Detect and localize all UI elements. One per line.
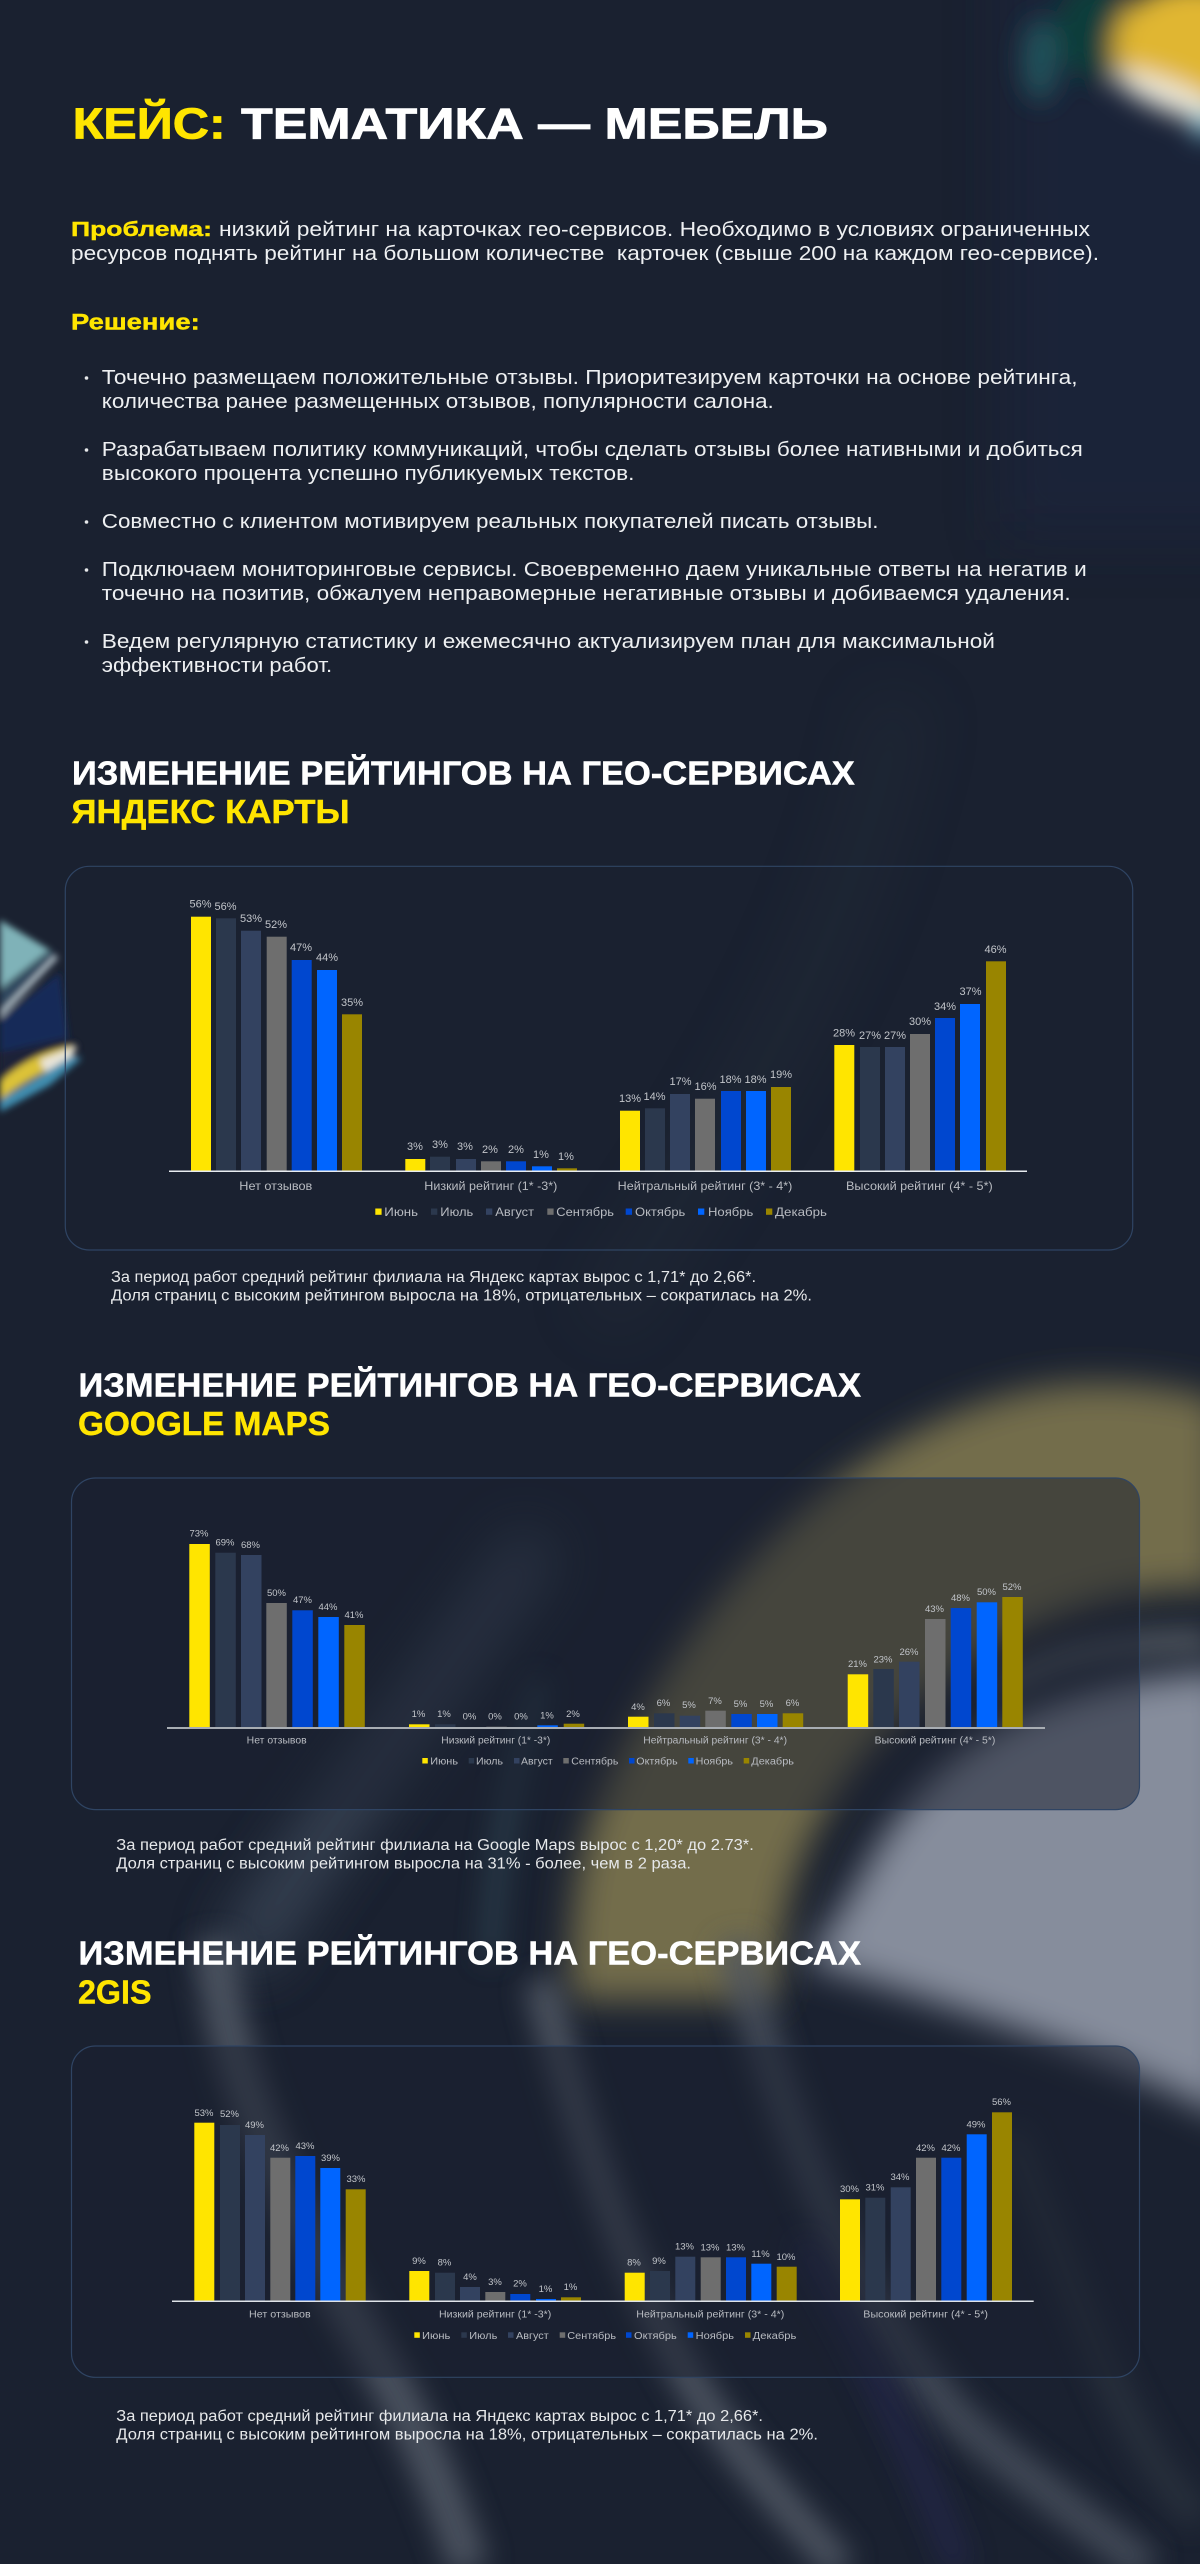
legend: Октябрь bbox=[634, 2330, 677, 2342]
bar group: neutral rating: 9% bbox=[652, 2256, 666, 2267]
bar group: no reviews: 69% bbox=[215, 1537, 235, 1548]
bar group: neutral rating: 13% bbox=[675, 2242, 695, 2252]
bar group: low rating bbox=[409, 2256, 581, 2301]
bar group: neutral rating: 8% bbox=[627, 2258, 641, 2268]
bar group: low rating: 3% bbox=[407, 1141, 423, 1153]
bar group: low rating: 4% bbox=[463, 2272, 477, 2283]
solution bullet list: количества ранее размещенных отзывов, популярности салона. bbox=[102, 391, 774, 413]
bar group: neutral rating: 17% bbox=[669, 1076, 692, 1088]
bar group: high rating: 48% bbox=[951, 1593, 971, 1604]
heading: Yandex Maps bbox=[72, 754, 855, 830]
bar group: high rating: 50% bbox=[977, 1587, 997, 1598]
note: Google Maps: Доля страниц с высоким рейтингом выросла на 31% - более, чем в 2 раза. bbox=[116, 1856, 691, 1872]
note: Yandex Maps: Доля страниц с высоким рейтингом выросла на 18%, отрицательных – сократилась на 2%. bbox=[111, 1288, 812, 1304]
note: Google Maps: За период работ средний рейтинг филиала на Google Maps вырос с 1,20* до 2.73*. bbox=[116, 1837, 754, 1854]
bar group: neutral rating: 13% bbox=[726, 2242, 746, 2254]
solution bullet list: Ведем регулярную статистику и ежемесячно актуализируем план для максимальной bbox=[102, 631, 995, 653]
bar group: low rating: 2% bbox=[513, 2278, 527, 2290]
heading: 2GIS: 2GIS bbox=[78, 1974, 152, 2010]
bar group: low rating: 1% bbox=[437, 1709, 451, 1720]
bar group: high rating: 27% bbox=[859, 1030, 881, 1042]
legend: Июнь bbox=[422, 2331, 450, 2342]
bar group: neutral rating: 10% bbox=[776, 2252, 796, 2263]
category labels: Высокий рейтинг (4* - 5*) bbox=[875, 1736, 995, 1746]
legend: Декабрь bbox=[751, 1756, 794, 1768]
panel: 2GIS chart bbox=[72, 2046, 1140, 2377]
heading: Yandex Maps: ИЗМЕНЕНИЕ РЕЙТИНГОВ НА ГЕО-СЕРВИСАХ bbox=[72, 754, 855, 792]
bar group: neutral rating: 6% bbox=[657, 1698, 671, 1709]
bar group: neutral rating: 18% bbox=[719, 1074, 742, 1086]
solution bullet list: Разрабатываем политику коммуникаций, чтобы сделать отзывы более нативными и добиться bbox=[102, 439, 1083, 461]
bar group: no reviews: 56% bbox=[214, 901, 237, 913]
heading: Google Maps: ИЗМЕНЕНИЕ РЕЙТИНГОВ НА ГЕО-СЕРВИСАХ bbox=[78, 1366, 861, 1404]
category labels: Низкий рейтинг (1* -3*) bbox=[424, 1179, 557, 1193]
category labels bbox=[247, 1736, 995, 1746]
legend: Сентябрь bbox=[567, 2330, 616, 2342]
note: 2GIS: Доля страниц с высоким рейтингом выросла на 18%, отрицательных – сократилась на 2%. bbox=[116, 2426, 818, 2444]
bar group: neutral rating: 13% bbox=[619, 1093, 641, 1105]
bar group: low rating: 2% bbox=[482, 1144, 498, 1156]
bar group: high rating: 43% bbox=[925, 1604, 945, 1615]
note: Google Maps bbox=[116, 1837, 754, 1872]
bar group: low rating: 0% bbox=[488, 1712, 502, 1722]
category labels: Нет отзывов bbox=[249, 2310, 311, 2320]
title bbox=[73, 98, 828, 148]
bar group: low rating: 3% bbox=[457, 1141, 473, 1153]
heading: Google Maps bbox=[78, 1366, 861, 1442]
bar group: neutral rating bbox=[628, 1696, 803, 1728]
bar group: no reviews: 53% bbox=[194, 2108, 214, 2119]
solution bullet list: Подключаем мониторинговые сервисы. Своевременно даем уникальные ответы на негатив и bbox=[102, 559, 1087, 581]
bar group: no reviews: 47% bbox=[290, 942, 312, 954]
bar group: low rating: 1% bbox=[540, 1710, 554, 1722]
bar group: high rating: 28% bbox=[833, 1028, 855, 1040]
solution bullet list: точечно на позитив, обжалуем неправомерные негативные отзывы и добиваемся удаления. bbox=[102, 583, 1071, 605]
problem text block: ресурсов поднять рейтинг на большом количестве карточек (свыше 200 на каждом гео-сервисе). bbox=[71, 243, 1099, 265]
legend bbox=[414, 2330, 796, 2342]
bar group: neutral rating: 18% bbox=[744, 1074, 767, 1086]
bar group: neutral rating: 4% bbox=[631, 1702, 645, 1713]
title: ТЕМАТИКА — МЕБЕЛЬ bbox=[241, 100, 828, 148]
bar group: neutral rating: 5% bbox=[760, 1699, 774, 1710]
bar group: no reviews: 35% bbox=[341, 997, 363, 1009]
bar group: no reviews: 49% bbox=[245, 2120, 265, 2131]
bar group: no reviews: 44% bbox=[316, 952, 338, 964]
solution bullet list: Точечно размещаем положительные отзывы. Приоритезируем карточки на основе рейтинга, bbox=[102, 367, 1078, 389]
bar group: high rating: 49% bbox=[966, 2120, 986, 2130]
legend: Октябрь bbox=[636, 1756, 678, 1768]
legend: Август bbox=[516, 2331, 549, 2342]
bar group: low rating: 2% bbox=[508, 1144, 524, 1156]
bar group: high rating: 31% bbox=[865, 2182, 885, 2194]
category labels: Нейтральный рейтинг (3* - 4*) bbox=[636, 2310, 784, 2320]
category labels bbox=[239, 1179, 993, 1193]
note: 2GIS bbox=[116, 2408, 818, 2444]
note: Yandex Maps bbox=[111, 1269, 812, 1304]
legend: Сентябрь bbox=[571, 1756, 618, 1768]
bar group: neutral rating: 13% bbox=[700, 2242, 720, 2254]
bar group: neutral rating: 16% bbox=[694, 1081, 717, 1093]
panel: Yandex Maps chart bbox=[65, 866, 1133, 1250]
bar group: high rating bbox=[833, 944, 1007, 1171]
bar group: low rating: 1% bbox=[533, 1149, 549, 1161]
legend: Сентябрь bbox=[556, 1205, 614, 1219]
category labels: Нейтральный рейтинг (3* - 4*) bbox=[643, 1736, 787, 1746]
bar group: low rating: 1% bbox=[564, 2282, 578, 2293]
bar group: no reviews: 68% bbox=[241, 1540, 261, 1551]
bar group: low rating: 0% bbox=[514, 1712, 528, 1722]
bar group: high rating: 30% bbox=[909, 1016, 931, 1028]
legend: Декабрь bbox=[753, 2330, 796, 2342]
heading: Google Maps: GOOGLE MAPS bbox=[78, 1405, 330, 1442]
bar group: no reviews bbox=[189, 898, 363, 1171]
bar group: no reviews: 56% bbox=[189, 898, 212, 910]
bar group: high rating: 34% bbox=[934, 1001, 956, 1013]
legend bbox=[422, 1756, 794, 1768]
bar group: low rating: 0% bbox=[463, 1712, 477, 1722]
bar group: low rating: 1% bbox=[558, 1151, 574, 1163]
bar group: neutral rating: 6% bbox=[786, 1698, 800, 1709]
bar group: high rating: 21% bbox=[848, 1659, 868, 1670]
solution bullet list: Совместно с клиентом мотивируем реальных покупателей писать отзывы. bbox=[102, 511, 879, 533]
bar group: neutral rating: 14% bbox=[643, 1091, 666, 1103]
problem text block: Проблема: bbox=[71, 219, 212, 241]
bar group: high rating: 27% bbox=[884, 1030, 906, 1042]
bar group: high rating: 30% bbox=[840, 2184, 860, 2195]
legend: Декабрь bbox=[775, 1205, 827, 1219]
bar group: no reviews: 73% bbox=[189, 1529, 209, 1540]
bar group: high rating: 56% bbox=[992, 2097, 1012, 2108]
solution heading: Решение: bbox=[71, 310, 200, 334]
legend: Ноябрь bbox=[696, 2330, 734, 2342]
bar group: no reviews: 50% bbox=[267, 1588, 287, 1599]
bar group: neutral rating: 7% bbox=[708, 1696, 722, 1707]
bar group: low rating: 2% bbox=[566, 1709, 580, 1720]
bar group: low rating: 9% bbox=[412, 2256, 426, 2267]
bar group: no reviews: 52% bbox=[220, 2109, 240, 2120]
legend: Октябрь bbox=[635, 1205, 685, 1219]
bar group: no reviews: 42% bbox=[270, 2143, 290, 2154]
solution bullet list bbox=[85, 367, 1087, 677]
bar group: high rating: 46% bbox=[984, 944, 1007, 956]
bar group: low rating: 1% bbox=[539, 2284, 553, 2295]
bar group: no reviews: 41% bbox=[344, 1610, 364, 1621]
bar group: no reviews: 44% bbox=[318, 1602, 338, 1613]
bar group: neutral rating: 11% bbox=[751, 2249, 770, 2260]
heading: 2GIS: ИЗМЕНЕНИЕ РЕЙТИНГОВ НА ГЕО-СЕРВИСАХ bbox=[78, 1934, 861, 1972]
category labels: Низкий рейтинг (1* -3*) bbox=[439, 2310, 551, 2320]
problem text block bbox=[71, 219, 1099, 265]
left glass prism decoration bbox=[0, 920, 82, 1112]
legend: Ноябрь bbox=[696, 1756, 733, 1768]
bar group: neutral rating bbox=[625, 2242, 797, 2301]
category labels bbox=[249, 2310, 988, 2320]
panel: Google Maps chart bbox=[72, 1478, 1140, 1810]
legend: Июль bbox=[476, 1756, 503, 1768]
bar group: high rating: 34% bbox=[890, 2172, 910, 2183]
bar group: no reviews bbox=[189, 1529, 365, 1728]
legend: Июль bbox=[440, 1205, 473, 1219]
legend: Июнь bbox=[430, 1756, 458, 1768]
category labels: Низкий рейтинг (1* -3*) bbox=[441, 1736, 550, 1746]
legend: Ноябрь bbox=[708, 1205, 753, 1219]
legend: Июнь bbox=[384, 1205, 418, 1219]
bar group: high rating: 42% bbox=[916, 2143, 936, 2154]
problem text block: низкий рейтинг на карточках гео-сервисов. Необходимо в условиях ограниченных bbox=[219, 219, 1090, 241]
note: 2GIS: За период работ средний рейтинг филиала на Яндекс картах вырос с 1,71* до 2,66*. bbox=[116, 2408, 763, 2425]
bar group: neutral rating bbox=[619, 1069, 792, 1171]
bar group: low rating bbox=[409, 1709, 584, 1728]
bar group: neutral rating: 5% bbox=[734, 1699, 748, 1710]
category labels: Нет отзывов bbox=[247, 1736, 307, 1746]
legend: Август bbox=[495, 1205, 535, 1219]
category labels: Нет отзывов bbox=[239, 1179, 312, 1193]
heading: 2GIS bbox=[78, 1934, 861, 2010]
bar group: high rating: 42% bbox=[941, 2143, 961, 2154]
bar group: high rating: 23% bbox=[873, 1654, 893, 1665]
solution bullet list: высокого процента успешно публикуемых текстов. bbox=[102, 463, 634, 485]
bar group: no reviews bbox=[194, 2108, 366, 2301]
bar group: high rating: 26% bbox=[899, 1647, 919, 1658]
note: Yandex Maps: За период работ средний рейтинг филиала на Яндекс картах вырос с 1,71* до 2,66*. bbox=[111, 1269, 756, 1286]
bar group: no reviews: 53% bbox=[240, 913, 262, 925]
bar group: no reviews: 39% bbox=[321, 2153, 341, 2164]
bar group: no reviews: 47% bbox=[293, 1595, 313, 1606]
category labels: Высокий рейтинг (4* - 5*) bbox=[863, 2310, 988, 2320]
bar group: neutral rating: 5% bbox=[682, 1700, 696, 1711]
legend bbox=[375, 1205, 827, 1219]
bar group: no reviews: 33% bbox=[346, 2174, 366, 2185]
bar group: high rating: 52% bbox=[1002, 1582, 1022, 1593]
bar group: no reviews: 52% bbox=[265, 919, 287, 931]
bar group: high rating bbox=[848, 1582, 1023, 1728]
bar group: high rating: 37% bbox=[959, 986, 982, 998]
bar group: low rating: 3% bbox=[432, 1139, 448, 1151]
heading: Yandex Maps: ЯНДЕКС КАРТЫ bbox=[72, 793, 350, 830]
solution bullet list: эффективности работ. bbox=[102, 655, 332, 677]
category labels: Высокий рейтинг (4* - 5*) bbox=[846, 1179, 993, 1193]
legend: Август bbox=[521, 1756, 553, 1768]
bar group: low rating: 8% bbox=[438, 2258, 452, 2268]
bar group: low rating bbox=[405, 1139, 577, 1171]
legend: Июль bbox=[469, 2331, 497, 2342]
bar group: low rating: 3% bbox=[488, 2277, 502, 2288]
bar group: neutral rating: 19% bbox=[770, 1069, 792, 1081]
bar group: high rating bbox=[840, 2097, 1012, 2301]
category labels: Нейтральный рейтинг (3* - 4*) bbox=[618, 1179, 792, 1193]
title: КЕЙС: bbox=[73, 98, 226, 148]
bar group: low rating: 1% bbox=[412, 1709, 426, 1720]
bar group: no reviews: 43% bbox=[295, 2141, 315, 2152]
